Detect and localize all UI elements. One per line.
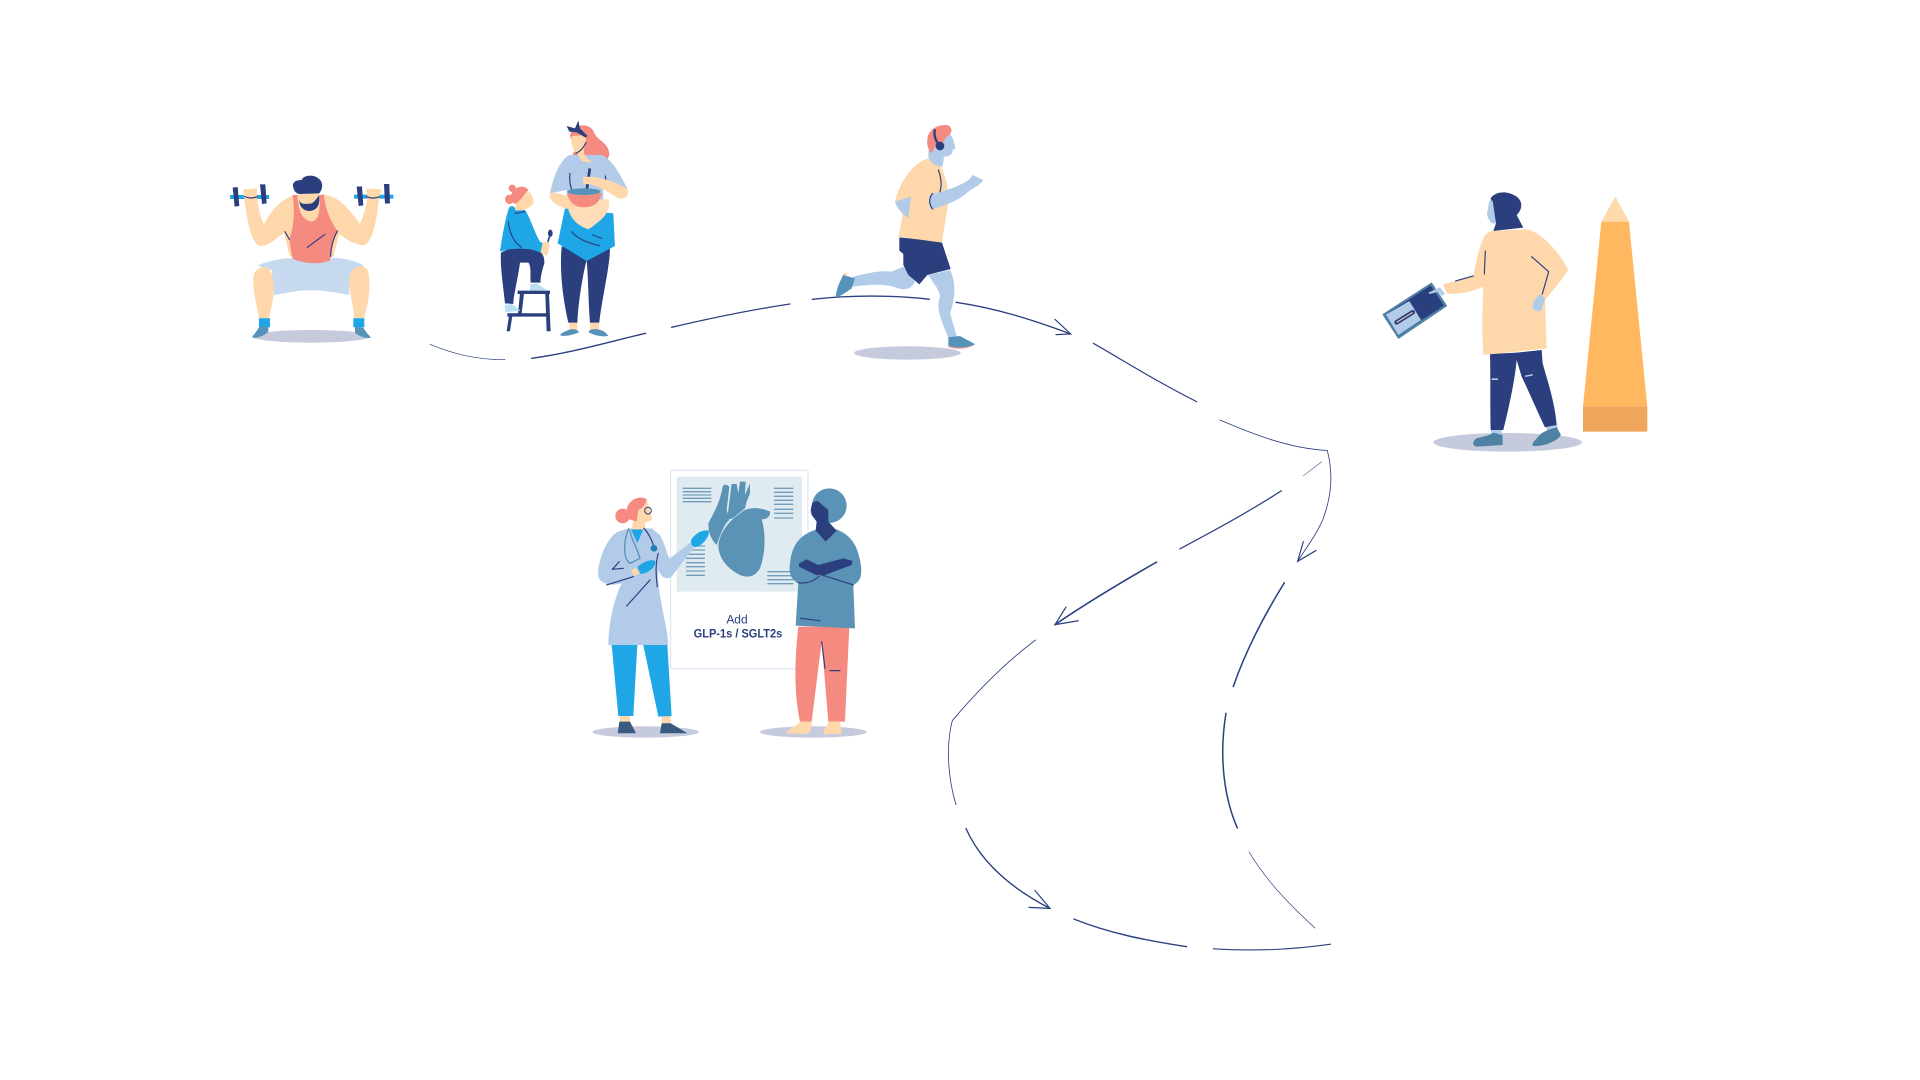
- figure: doctor and patient at heart poster: [592, 470, 867, 738]
- figure: runner with headphones: [835, 125, 983, 360]
- figure: mother and child with bowl: [500, 121, 628, 336]
- figure: man squatting with dumbbells: [230, 176, 393, 343]
- patient: [786, 488, 861, 734]
- poster board: [671, 470, 808, 669]
- obelisk: [1583, 197, 1647, 432]
- clipboard: [1382, 282, 1447, 339]
- stool: [507, 291, 551, 331]
- dashed journey path with arrows: [430, 296, 1331, 950]
- poster text: Add: [726, 612, 748, 626]
- child: [500, 185, 553, 312]
- doctor: [598, 498, 709, 733]
- heart: [708, 485, 729, 545]
- figure: woman with clipboard: [1382, 192, 1582, 452]
- poster board: GLP-1s / SGLT2s: [694, 627, 783, 641]
